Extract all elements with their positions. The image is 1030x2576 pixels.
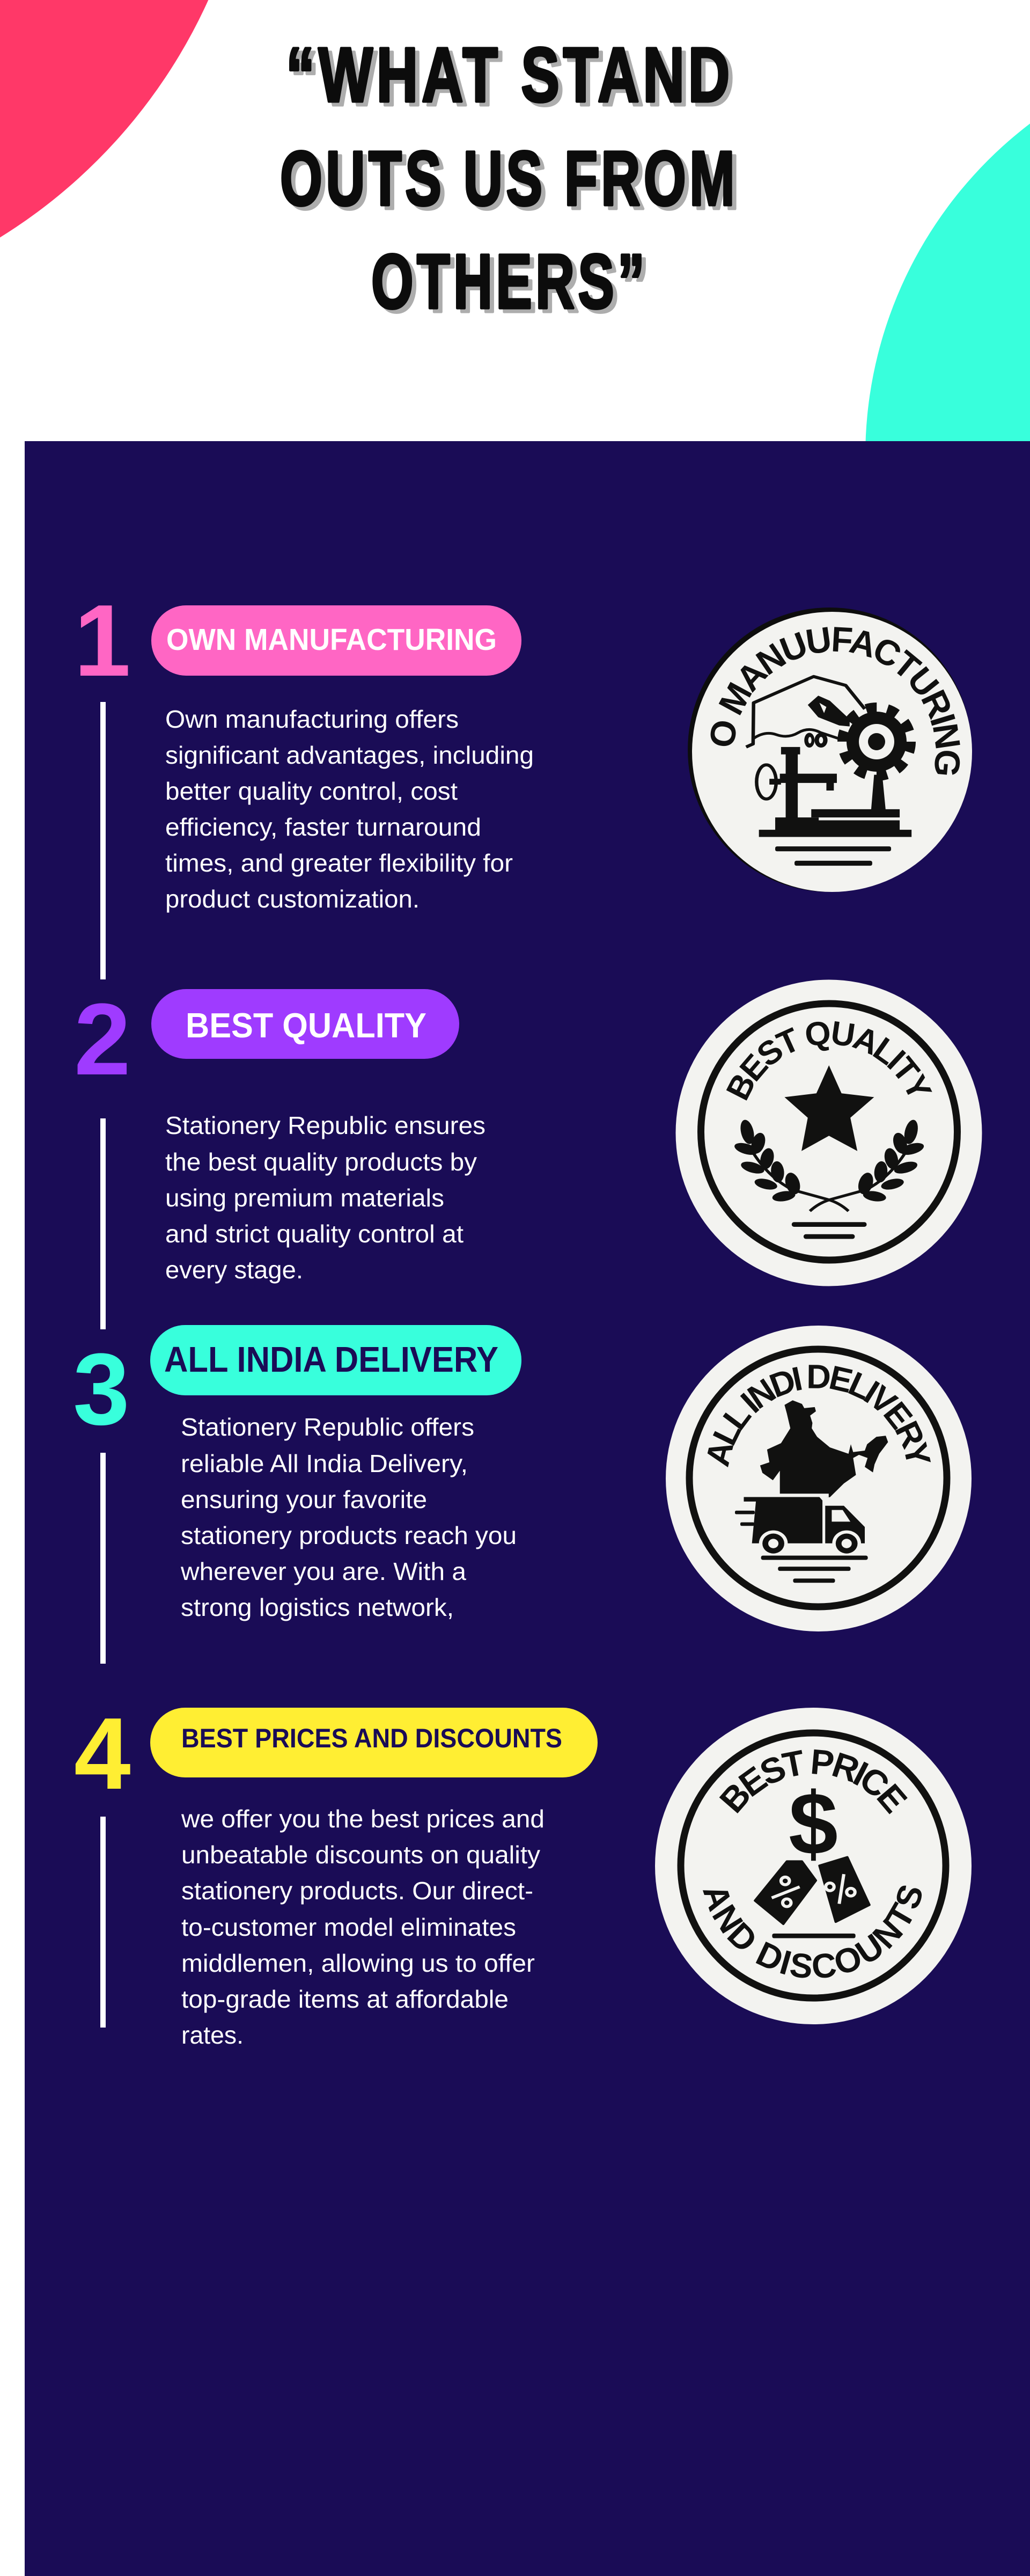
body text 4: we offer you the best prices and [181, 1805, 545, 1833]
body text 3: ensuring your favorite [181, 1485, 427, 1513]
vertical rule 4 [100, 1817, 106, 2028]
number 4: 4 [74, 1697, 131, 1811]
body text 1: times, and greater flexibility for [165, 849, 513, 877]
title [280, 32, 738, 325]
body text 2: Stationery Republic ensures [165, 1111, 485, 1139]
body text 2: every stage. [165, 1256, 303, 1284]
number 2: 2 [74, 983, 131, 1096]
vertical rule 2 [100, 1118, 106, 1329]
badge 3 curved text: ALL INDI DELIVERY [707, 1365, 931, 1467]
badge 1: manufacturing [688, 608, 972, 892]
heading pill: best prices and discounts [150, 1708, 598, 1777]
body text 4: to-customer model eliminates [181, 1913, 516, 1941]
heading pill: own manufacturing: OWN MANUFACTURING [166, 623, 497, 657]
panel: item 4 best prices and discounts [74, 1697, 598, 2049]
body text 3 [180, 1413, 517, 1621]
panel: item 3 all india delivery [73, 1325, 521, 1664]
body text 2 [165, 1111, 485, 1284]
body text 3: wherever you are. With a [180, 1557, 466, 1585]
heading pill: best quality: BEST QUALITY [186, 1006, 426, 1045]
heading pill: best quality [151, 989, 459, 1059]
panel: item 1 own manufacturing [74, 584, 534, 979]
vertical rule 3 [100, 1453, 106, 1664]
badge 3: all india delivery [666, 1326, 972, 1631]
body text 4 [181, 1805, 545, 2049]
badge 4: best price and discounts [655, 1708, 972, 2024]
title: “WHAT STAND [286, 32, 733, 118]
heading pill: all india delivery [150, 1325, 521, 1395]
decorative circle: coral top left [0, 0, 256, 319]
body text 4: rates. [181, 2021, 244, 2049]
number 1: 1 [74, 584, 131, 698]
body text 1: Own manufacturing offers [165, 705, 459, 733]
badge 4 curved text top: BEST PRICE [719, 1750, 908, 1814]
badge 2: best quality [676, 980, 982, 1286]
body text 3: reliable All India Delivery, [181, 1450, 468, 1477]
icon: hand, drill press and base [746, 677, 911, 866]
body text 1: product customization. [165, 885, 420, 913]
body text 4: unbeatable discounts on quality [181, 1841, 540, 1869]
body text 4: stationery products. Our direct- [181, 1877, 533, 1905]
panel: item 2 best quality [74, 983, 485, 1329]
icon: percent tags [755, 1857, 870, 1938]
body text 1 [165, 705, 534, 913]
body text 2: using premium materials [165, 1184, 444, 1212]
badge 1 curved text: O MANUUFACTURING [710, 627, 960, 775]
body text 2: the best quality products by [165, 1148, 477, 1176]
title: OUTS US FROM [280, 135, 738, 222]
body text 1: better quality control, cost [165, 777, 458, 805]
icon: gear [843, 708, 910, 775]
title: OTHERS” [371, 238, 648, 325]
number 3: 3 [73, 1333, 130, 1446]
body text 4: middlemen, allowing us to offer [181, 1949, 535, 1977]
heading pill: best prices and discounts: BEST PRICES AND DISCOUNTS [181, 1723, 562, 1753]
body text 3: strong logistics network, [181, 1593, 454, 1621]
body text 3: Stationery Republic offers [181, 1413, 474, 1441]
body text 4: top-grade items at affordable [181, 1985, 509, 2013]
badge 4 curved text bottom: AND DISCOUNTS [703, 1886, 922, 1978]
body text 2: and strict quality control at [165, 1220, 464, 1248]
body text 1: efficiency, faster turnaround [165, 813, 481, 841]
body text 3: stationery products reach you [181, 1521, 517, 1549]
body text 1: significant advantages, including [165, 741, 534, 769]
icon: star and laurel [733, 1065, 925, 1239]
heading pill: own manufacturing [151, 605, 521, 676]
decorative circle: teal right [865, 38, 1030, 874]
icon: dollar sign: $ [789, 1774, 838, 1873]
icon: india map and truck [735, 1400, 888, 1583]
heading pill: all india delivery: ALL INDIA DELIVERY [164, 1340, 498, 1380]
vertical rule 1 [100, 702, 106, 979]
badge 2 curved text: BEST QUALITY [726, 1021, 932, 1101]
